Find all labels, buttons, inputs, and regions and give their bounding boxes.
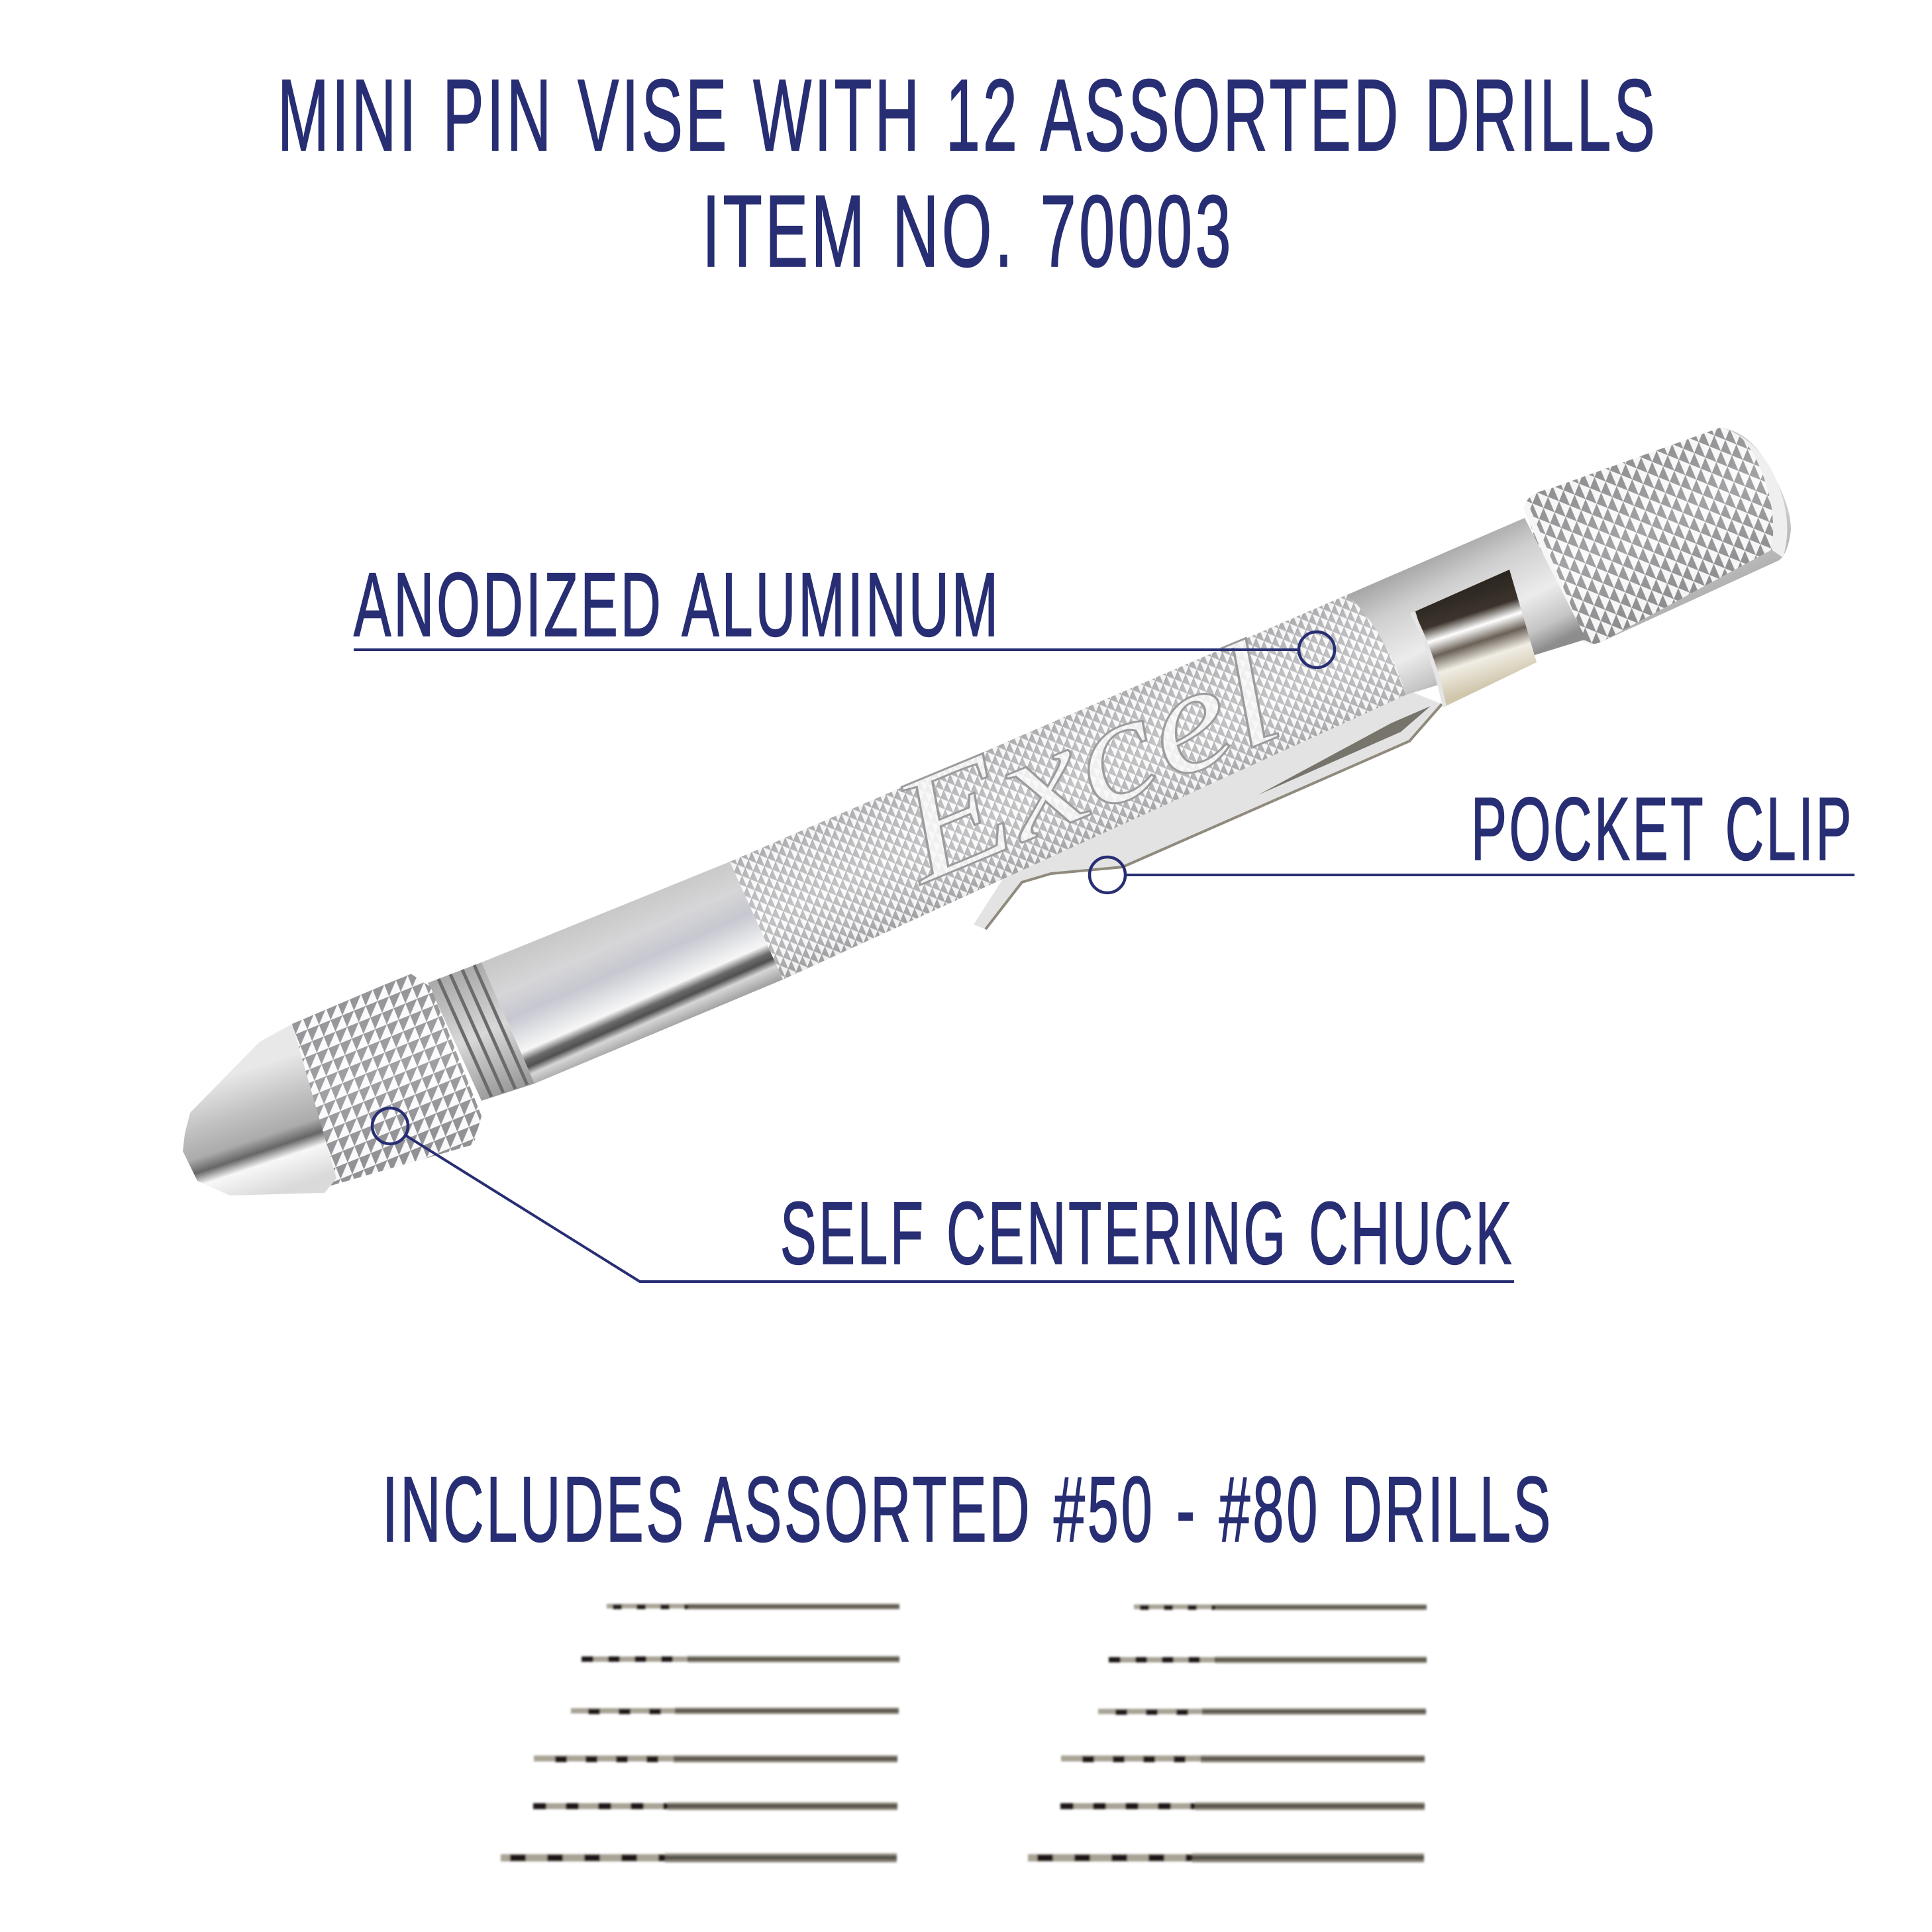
threads	[428, 962, 534, 1101]
callout: anodized aluminum: ANODIZED ALUMINUM	[354, 554, 1001, 656]
title	[278, 58, 1658, 288]
chuck nose cone	[183, 1024, 336, 1195]
drill 5	[533, 1802, 897, 1810]
drill 11	[1060, 1802, 1425, 1810]
drill 3	[571, 1707, 899, 1714]
callout: pocket clip	[1090, 779, 1855, 893]
smooth tube	[482, 862, 783, 1084]
title: ITEM NO. 70003	[702, 174, 1234, 288]
drill 9	[1098, 1708, 1426, 1715]
engraved logo: Excel	[869, 609, 1301, 915]
knurled chuck	[292, 974, 482, 1186]
drills: right column	[1028, 1604, 1427, 1862]
drill 12	[1028, 1853, 1424, 1862]
knurled body	[730, 595, 1406, 980]
pin vise product illustration	[183, 428, 1791, 1195]
drill 2	[582, 1656, 899, 1662]
sliding chrome band	[1412, 570, 1537, 707]
drill 7	[1134, 1604, 1427, 1610]
neck tube	[1347, 518, 1586, 695]
end cap knurled	[1525, 428, 1791, 644]
pocket clip	[974, 689, 1442, 929]
drills: left column	[501, 1603, 899, 1862]
drill 1	[607, 1603, 899, 1609]
drill 4	[534, 1755, 897, 1762]
drill 10	[1061, 1755, 1425, 1762]
drill 6	[501, 1853, 897, 1862]
drill 8	[1109, 1656, 1427, 1663]
callout: self centering chuck	[372, 1108, 1514, 1283]
